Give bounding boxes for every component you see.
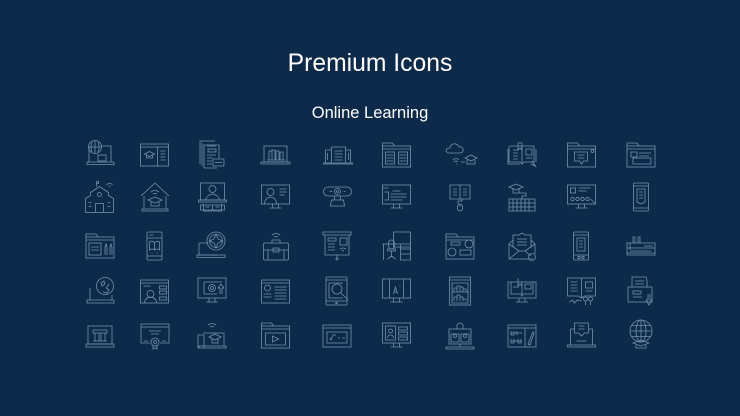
icon: envelope with notification	[509, 233, 536, 260]
icon: browser with diagram and pencil	[508, 325, 536, 347]
icon: briefcase with wifi	[264, 234, 288, 260]
icon: monitor with open book	[508, 278, 536, 302]
icon: laptop with column	[86, 326, 114, 347]
title: Premium Icons	[288, 50, 452, 76]
icon: laptop with globe	[87, 140, 114, 164]
icon: dual video call on stand	[446, 323, 474, 349]
icon: study desk with chair	[382, 232, 410, 260]
subtitle: Online Learning	[312, 104, 428, 122]
icon: folder with media panels	[627, 143, 655, 167]
icon: graduation cap and keyboard	[509, 184, 535, 211]
icon: presentation board	[323, 232, 351, 260]
icon: smartphone with document	[634, 183, 648, 211]
icon: monitor with font panel	[382, 279, 410, 302]
icon: monitor with tutor	[262, 185, 290, 208]
icon: folder with chat bubble	[568, 143, 596, 167]
icon: monitor with text panel	[382, 185, 410, 208]
icon: monitor with profile list	[382, 323, 410, 347]
icon: laptop with chat bubble	[568, 323, 596, 347]
icon: browser with article	[262, 280, 290, 303]
icon: laptop with student and book	[198, 183, 226, 211]
icon: laptop with world bubble	[87, 278, 114, 303]
icon: house with graduation cap	[141, 183, 169, 211]
icon: folder with two text columns	[382, 143, 410, 167]
icon: tablet with magnifier	[326, 277, 348, 305]
icon: phone with open book	[147, 232, 162, 260]
icon: laptop with bookshelf	[261, 146, 290, 164]
icon: certificate browser	[141, 324, 169, 349]
icon: school with flag and wifi	[86, 182, 114, 212]
icon: browser with math formula	[323, 325, 351, 347]
icon: webcam	[324, 187, 352, 206]
icon: tablet bookshelf	[450, 277, 470, 305]
icon: folder with video player	[262, 323, 290, 348]
icon: browser with graduation cap	[140, 144, 168, 166]
icon: monitor with dots and cursor	[568, 185, 596, 208]
icon: book and mouse	[450, 185, 470, 211]
icon: folder with profile panels	[446, 234, 474, 259]
icon: wifi laptop and cap	[198, 324, 226, 348]
icon: school building on laptop	[324, 147, 352, 164]
icon: cloud and graduation caps	[446, 144, 477, 164]
icon: folder with download	[628, 277, 652, 305]
icon: monitor with gear	[198, 278, 226, 302]
icon: laptop with compass globe	[197, 232, 225, 258]
icon: open book with earbuds	[568, 278, 596, 305]
icon: smartphone with notes	[574, 232, 588, 260]
icon: PDF document stack	[200, 141, 224, 168]
icon: stack of books	[627, 237, 655, 255]
icon: browser with avatar	[140, 280, 168, 303]
icon: folder with chart	[86, 234, 114, 258]
icon: globe with graduation cap	[630, 320, 652, 348]
icon: open book with cursor	[508, 143, 536, 167]
